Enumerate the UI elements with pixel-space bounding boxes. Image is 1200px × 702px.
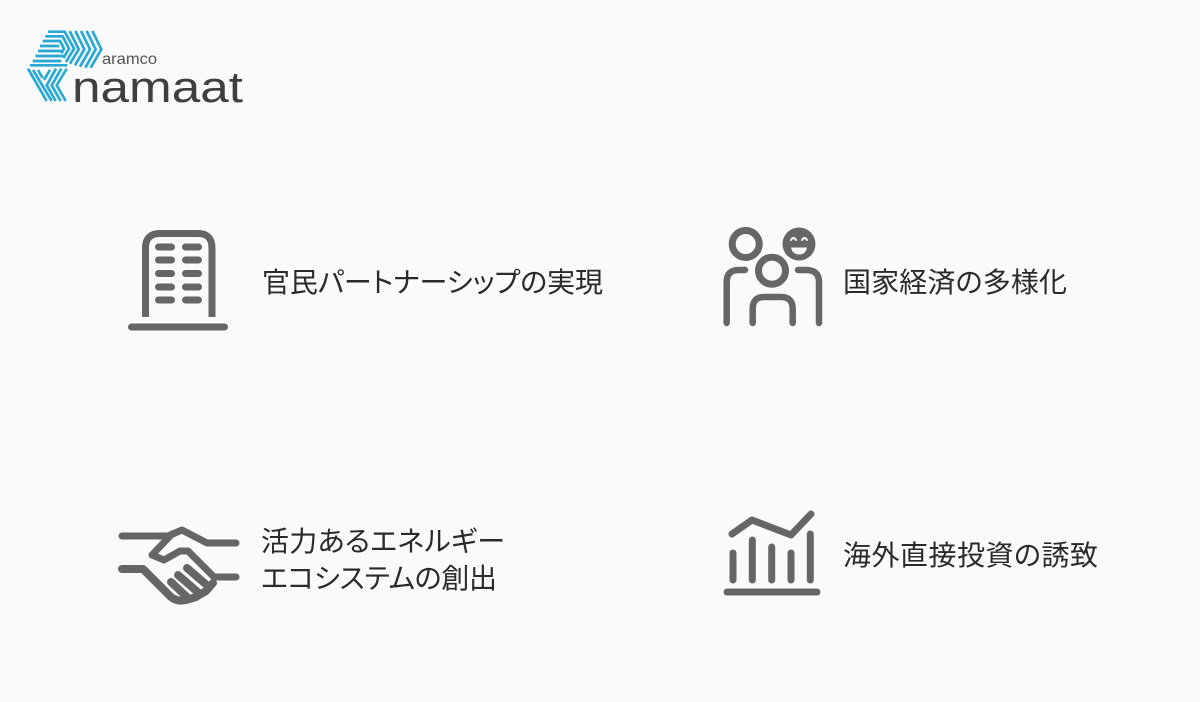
label: 国家経済の多様化 xyxy=(843,267,1067,298)
wordmark: aramco: aramco xyxy=(102,51,157,68)
logo mark: blue chevron hexagon xyxy=(28,31,101,101)
label line 2: エコシステムの創出 xyxy=(261,563,497,594)
panel: attracting foreign direct investment xyxy=(727,514,1098,592)
logo: aramco namaat xyxy=(28,31,243,112)
panel: public-private partnership xyxy=(132,234,603,327)
icon: office building xyxy=(132,234,224,327)
icon: bar and line chart xyxy=(727,514,817,592)
panel: economic diversification xyxy=(727,228,1067,323)
icon: three people xyxy=(727,228,819,323)
label xyxy=(261,526,505,594)
panel: vibrant energy ecosystem xyxy=(122,526,505,601)
label: 海外直接投資の誘致 xyxy=(843,540,1098,571)
label line 1: 活力あるエネルギー xyxy=(261,526,505,557)
wordmark: namaat: namaat xyxy=(72,63,243,112)
label: 官民パートナーシップの実現 xyxy=(262,267,603,298)
icon: handshake xyxy=(122,530,236,601)
